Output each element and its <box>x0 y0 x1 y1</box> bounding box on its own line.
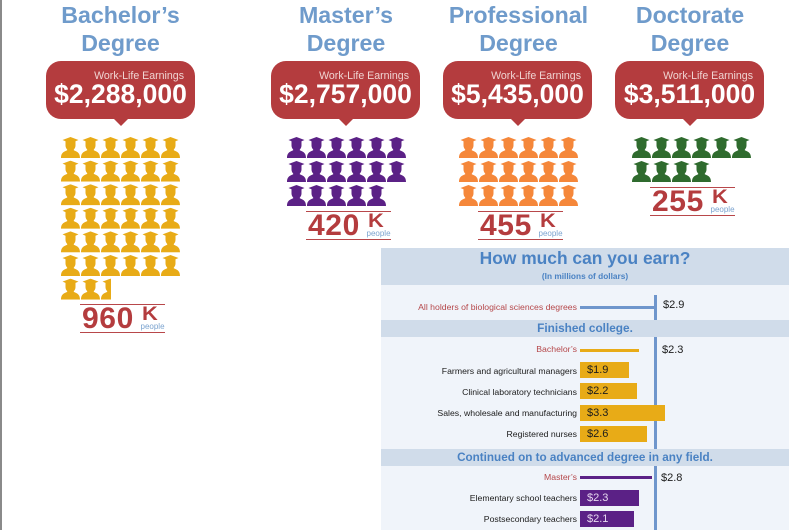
left page border <box>0 0 2 530</box>
count: 960 K people <box>80 304 165 333</box>
row: Sales, wholesale and manufacturing: $3.3 <box>587 407 608 419</box>
heading: Bachelor's Degree <box>61 2 180 56</box>
count: 420 K people: people <box>366 229 391 238</box>
callout: Master's earnings: Work-Life Earnings <box>319 70 409 82</box>
count: 255 K people: people <box>710 205 735 214</box>
heading: Professional Degree: Degree <box>479 30 558 56</box>
heading: Doctorate Degree <box>636 2 744 56</box>
section band: Finished college: Finished college. <box>537 321 633 335</box>
row: Postsecondary teachers <box>484 511 634 527</box>
heading: Master's Degree: Master’s <box>299 2 393 28</box>
section band: advanced degree: Continued on to advanced degree in any field. <box>457 451 713 464</box>
row: Farmers and agricultural managers: Farmers and agricultural managers <box>442 366 577 376</box>
heading: Master's Degree: Degree <box>307 30 385 56</box>
callout: Bachelor's earnings: $2,288,000 <box>54 79 187 109</box>
count: 960 K people: K <box>142 304 158 325</box>
row: Sales, wholesale and manufacturing <box>437 405 665 421</box>
row: Postsecondary teachers: Postsecondary teachers <box>484 514 577 524</box>
reference axis line, lower <box>654 466 656 530</box>
row: Clinical laboratory technicians: $2.2 <box>587 385 608 397</box>
heading: Doctorate Degree: Doctorate <box>636 2 744 28</box>
count: 455 K people: people <box>538 229 563 238</box>
heading: Professional Degree <box>449 2 588 56</box>
heading: Doctorate Degree: Degree <box>651 30 729 56</box>
heading: Bachelor's Degree: Bachelor’s <box>61 2 180 28</box>
callout: Doctorate earnings: Work-Life Earnings <box>663 70 753 82</box>
callout: Master's earnings <box>271 61 420 119</box>
heading: Professional Degree: Professional <box>449 2 588 28</box>
callout: Master's earnings: $2,757,000 <box>279 79 412 109</box>
row: Bachelor's: $2.3 <box>662 344 683 356</box>
callout: Doctorate earnings: $3,511,000 <box>624 79 755 109</box>
row: Registered nurses: Registered nurses <box>506 429 577 439</box>
count: 455 K people: K <box>540 211 556 232</box>
count: 960 K people: 960 <box>82 302 134 335</box>
row: Master's <box>544 472 682 484</box>
row: Master's: Master’s <box>544 472 577 482</box>
row: Bachelor's: Bachelor’s <box>536 344 577 354</box>
section band: Finished college <box>381 320 789 337</box>
callout: Doctorate earnings <box>615 61 764 119</box>
count: 420 K people: K <box>368 211 384 232</box>
row: all holders of biological sciences degrees <box>418 299 684 312</box>
row: Clinical laboratory technicians: Clinical laboratory technicians <box>462 387 577 397</box>
count: 255 K people <box>650 187 735 216</box>
count: 255 K people: 255 <box>652 185 704 218</box>
row: Elementary school teachers: Elementary school teachers <box>470 493 577 503</box>
reference axis line, middle <box>654 337 656 449</box>
callout: Professional earnings: Work-Life Earnings <box>491 70 581 82</box>
row: Elementary school teachers <box>470 490 639 506</box>
icons: Master's graduates pictogram <box>287 137 406 206</box>
icons: Bachelor's graduates pictogram <box>61 137 180 300</box>
count: 960 K people: people <box>140 322 165 331</box>
heading: Master's Degree <box>299 2 393 56</box>
row: Postsecondary teachers: $2.1 <box>587 513 608 525</box>
row: Bachelor's <box>536 344 683 356</box>
icons: Doctorate graduates pictogram <box>632 137 751 182</box>
row: Registered nurses: $2.6 <box>587 428 608 440</box>
row: Elementary school teachers: $2.3 <box>587 492 608 504</box>
callout: Bachelor's earnings <box>46 61 195 119</box>
heading: Bachelor's Degree: Degree <box>81 30 160 56</box>
row: Master's: $2.8 <box>661 472 682 484</box>
row: Registered nurses <box>506 426 647 442</box>
reference axis line, upper <box>654 295 656 320</box>
count: 255 K people: K <box>712 187 728 208</box>
panel heading: (In millions of dollars) <box>542 271 628 281</box>
section band: advanced degree <box>381 449 789 466</box>
row: Farmers and agricultural managers <box>442 362 629 378</box>
count: 455 K people: 455 <box>480 209 532 242</box>
icons: Professional graduates pictogram <box>459 137 578 206</box>
callout: Bachelor's earnings: Work-Life Earnings <box>94 70 184 82</box>
row: all holders of biological sciences degrees: All holders of biological sciences degrees <box>418 302 577 312</box>
row: Clinical laboratory technicians <box>462 383 637 399</box>
callout: Professional earnings <box>443 61 592 119</box>
row: Sales, wholesale and manufacturing: Sales, wholesale and manufacturing <box>437 408 577 418</box>
count: 420 K people <box>306 211 391 240</box>
callout: Professional earnings: $5,435,000 <box>451 79 584 109</box>
count: 455 K people <box>478 211 563 240</box>
panel: how much can you earn <box>381 248 789 530</box>
row: all holders of biological sciences degrees: $2.9 <box>663 299 684 311</box>
panel heading <box>381 248 789 285</box>
panel heading: How much can you earn? <box>480 248 690 268</box>
count: 420 K people: 420 <box>308 209 360 242</box>
row: Farmers and agricultural managers: $1.9 <box>587 364 608 376</box>
